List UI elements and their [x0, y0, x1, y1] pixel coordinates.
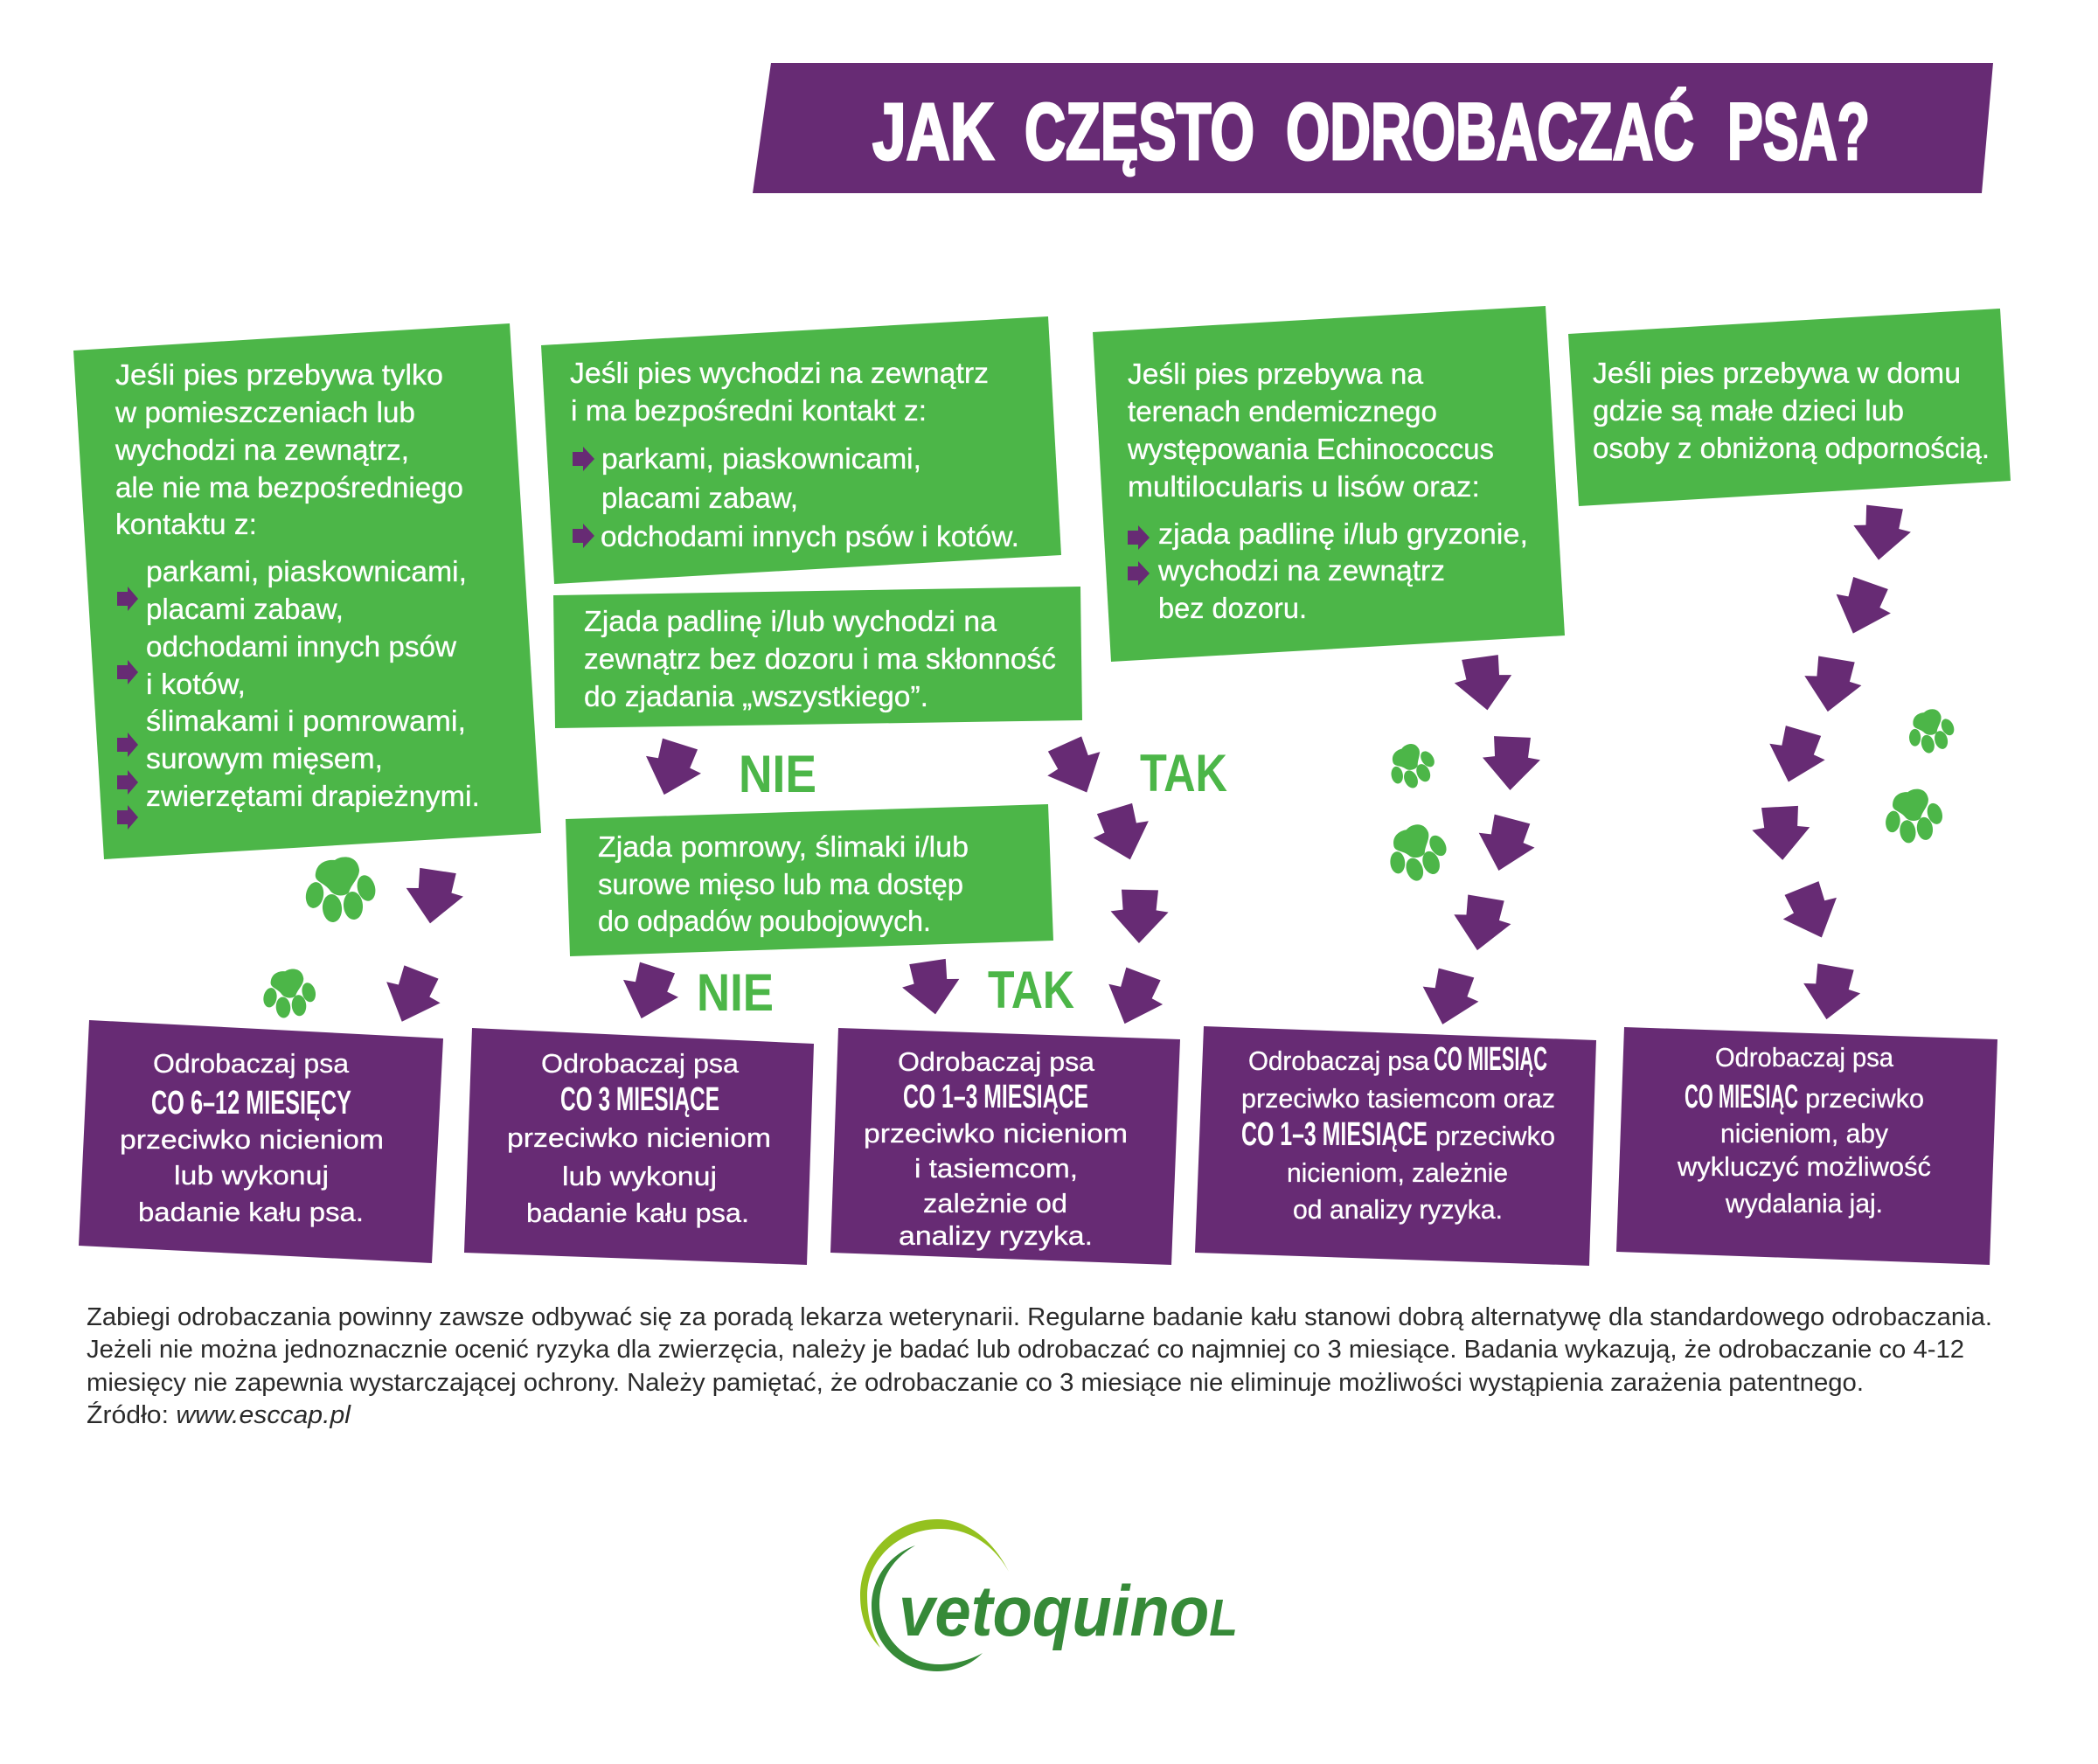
panel: eats carrion question: zewnątrz bez dozoru i ma skłonność [584, 642, 1056, 675]
panel: outdoor contact condition: Jeśli pies wychodzi na zewnątrz [570, 357, 989, 389]
panel: endemic area condition: terenach endemicznego [1128, 395, 1437, 427]
footer note: Zabiegi odrobaczania powinny zawsze odbywać się za poradą lekarza weterynarii. Regularne badanie kału stanowi dobrą alternatywę dla standardowego odrobaczania. [87, 1303, 1992, 1331]
panel: indoor dog condition: placami zabaw, [146, 593, 344, 625]
footer note: Źródło: www.esccap.pl [87, 1401, 351, 1429]
panel: indoor dog condition: kontaktu z: [115, 508, 257, 540]
panel: result monthly to exclude eggs: Odrobaczaj psa [1715, 1042, 1894, 1073]
arrows: column one [375, 866, 467, 1032]
footer note [87, 1303, 1992, 1429]
title banner [753, 63, 1993, 193]
panel: result every 3 months [464, 1028, 814, 1265]
panel: result monthly and 1-3 months: CO MIESIĄC [1434, 1041, 1547, 1078]
panel: eats slugs question: Zjada pomrowy, ślimaki i/lub [598, 830, 969, 863]
panel: outdoor contact condition [541, 316, 1061, 584]
panel: result monthly to exclude eggs: przeciwko [1805, 1083, 1924, 1114]
panel: endemic area condition: bez dozoru. [1158, 592, 1307, 624]
panel: eats slugs question [566, 804, 1053, 956]
panel: result every 3 months: badanie kału psa. [526, 1198, 749, 1228]
panel: indoor dog condition: odchodami innych psów [146, 630, 456, 663]
panel: result monthly to exclude eggs [1616, 1027, 1997, 1265]
footer note: Jeżeli nie można jednoznacznie ocenić ryzyka dla zwierzęcia, należy je badać lub odrobaczać co najmniej co 3 miesiące. Badania wykazują, że odrobaczanie co 4-12 [87, 1336, 1964, 1364]
panel: result every 1-3 months: CO 1–3 MIESIĄCE [903, 1079, 1088, 1115]
panel: indoor dog condition: ale nie ma bezpośredniego [115, 471, 463, 504]
label: NIE second: NIE [697, 963, 774, 1022]
panel: eats slugs question: surowe mięso lub ma dostęp [598, 868, 963, 900]
arrows: column four [1414, 653, 1541, 1031]
panel: result every 1-3 months [830, 1028, 1180, 1265]
panel: result every 6-12 months: przeciwko nicieniom [120, 1124, 384, 1155]
panel: result monthly and 1-3 months: przeciwko [1435, 1121, 1555, 1151]
panel: result monthly and 1-3 months: CO 1–3 MIESIĄCE [1241, 1116, 1428, 1153]
panel: eats slugs question: do odpadów poubojowych. [598, 905, 931, 937]
icon: bullet arrows [573, 447, 594, 548]
panel: endemic area condition [1093, 306, 1565, 662]
panel: result monthly to exclude eggs: nicieniom, aby [1720, 1118, 1888, 1149]
panel: result every 6-12 months: CO 6–12 MIESIĘCY [151, 1085, 351, 1122]
panel: outdoor contact condition: placami zabaw, [601, 482, 798, 514]
panel: result every 1-3 months: i tasiemcom, [914, 1153, 1078, 1184]
panel: result every 3 months: przeciwko nicieniom [507, 1122, 771, 1153]
panel: endemic area condition: Jeśli pies przebywa na [1128, 358, 1424, 390]
panel: result every 6-12 months [79, 1020, 443, 1263]
panel: result monthly and 1-3 months: przeciwko tasiemcom oraz [1241, 1083, 1555, 1114]
panel: outdoor contact condition: odchodami innych psów i kotów. [601, 520, 1019, 552]
panel: indoor dog condition [73, 323, 541, 859]
panel: indoor dog condition: Jeśli pies przebywa tylko [115, 358, 443, 391]
panel: indoor dog condition: zwierzętami drapieżnymi. [146, 780, 480, 812]
logo: vetoquinol: vetoquinoL [899, 1572, 1238, 1651]
label: NIE first: NIE [739, 745, 816, 803]
icon: bullet arrows [117, 587, 138, 830]
panel: eats carrion question: Zjada padlinę i/lub wychodzi na [584, 605, 997, 637]
icon: paw print column four lower [1380, 818, 1455, 887]
panel: indoor dog condition: parkami, piaskownicami, [146, 555, 467, 587]
panel: result every 3 months: CO 3 MIESIĄCE [560, 1081, 719, 1118]
icon: paw print column five upper [1904, 705, 1959, 757]
icon: paw print large left [304, 857, 379, 923]
panel: result monthly and 1-3 months: Odrobaczaj psa [1248, 1045, 1430, 1076]
panel: endemic area condition: zjada padlinę i/lub gryzonie, [1158, 517, 1528, 550]
panel: result monthly and 1-3 months [1195, 1026, 1596, 1266]
panel: small children condition: osoby z obniżoną odpornością. [1593, 432, 1990, 464]
arrows: column two NIE path [614, 735, 964, 1027]
panel: endemic area condition: multilocularis u lisów oraz: [1128, 470, 1480, 503]
panel: result every 6-12 months: Odrobaczaj psa [153, 1048, 350, 1079]
panel: result every 6-12 months: lub wykonuj [174, 1160, 329, 1191]
panel: result every 1-3 months: Odrobaczaj psa [898, 1046, 1095, 1077]
panel: result every 1-3 months: przeciwko nicieniom [864, 1118, 1128, 1149]
panel: result monthly and 1-3 months: od analizy ryzyka. [1293, 1194, 1503, 1225]
arrows: column three TAK path [1039, 732, 1171, 1034]
icon: bullet arrows [1128, 525, 1150, 586]
icon: paw print small left [262, 969, 317, 1018]
panel: indoor dog condition: wychodzi na zewnątrz, [115, 434, 409, 466]
arrows: column five [1751, 504, 1914, 1024]
panel: endemic area condition: wychodzi na zewnątrz [1157, 554, 1445, 587]
panel: result monthly to exclude eggs: wydalania jaj. [1725, 1188, 1883, 1219]
panel: small children condition: gdzie są małe dzieci lub [1593, 394, 1904, 427]
panel: indoor dog condition: ślimakami i pomrowami, [146, 705, 466, 737]
panel: result every 1-3 months: analizy ryzyka. [899, 1220, 1093, 1251]
panel: result every 3 months: Odrobaczaj psa [541, 1048, 740, 1079]
panel: result every 6-12 months: badanie kału psa. [138, 1197, 364, 1227]
panel: outdoor contact condition: parkami, piaskownicami, [601, 442, 921, 475]
panel: eats carrion question: do zjadania „wszystkiego”. [584, 680, 928, 712]
title banner: JAK [872, 87, 994, 177]
panel: result every 3 months: lub wykonuj [562, 1161, 717, 1191]
title banner: CZĘSTO [1025, 87, 1254, 177]
label: TAK second: TAK [988, 961, 1074, 1019]
title banner: ODROBACZAĆ [1286, 87, 1694, 177]
icon: paw print column five lower [1882, 788, 1946, 845]
panel: result monthly to exclude eggs: wykluczyć możliwość [1677, 1151, 1931, 1182]
panel: result every 1-3 months: zależnie od [923, 1188, 1067, 1219]
panel: eats carrion question [553, 587, 1082, 728]
panel: result monthly to exclude eggs: CO MIESIĄC [1685, 1079, 1798, 1115]
panel: result monthly and 1-3 months: nicieniom, zależnie [1287, 1157, 1508, 1188]
panel: indoor dog condition: surowym mięsem, [146, 742, 383, 774]
label: TAK first: TAK [1140, 744, 1227, 802]
icon: paw print column four upper [1382, 737, 1442, 795]
panel: small children condition [1568, 309, 2011, 506]
panel: outdoor contact condition: i ma bezpośredni kontakt z: [571, 394, 927, 427]
logo: vetoquinol [860, 1519, 1238, 1671]
panel: indoor dog condition: i kotów, [146, 668, 246, 700]
panel: small children condition: Jeśli pies przebywa w domu [1593, 357, 1961, 389]
panel: endemic area condition: występowania Echinococcus [1127, 433, 1494, 465]
title banner: PSA? [1727, 87, 1870, 177]
footer note: miesięcy nie zapewnia wystarczającej ochrony. Należy pamiętać, że odrobaczanie co 3 miesiące nie eliminuje możliwości wystąpienia zarażenia patentnego. [87, 1369, 1864, 1397]
panel: indoor dog condition: w pomieszczeniach lub [115, 396, 415, 428]
